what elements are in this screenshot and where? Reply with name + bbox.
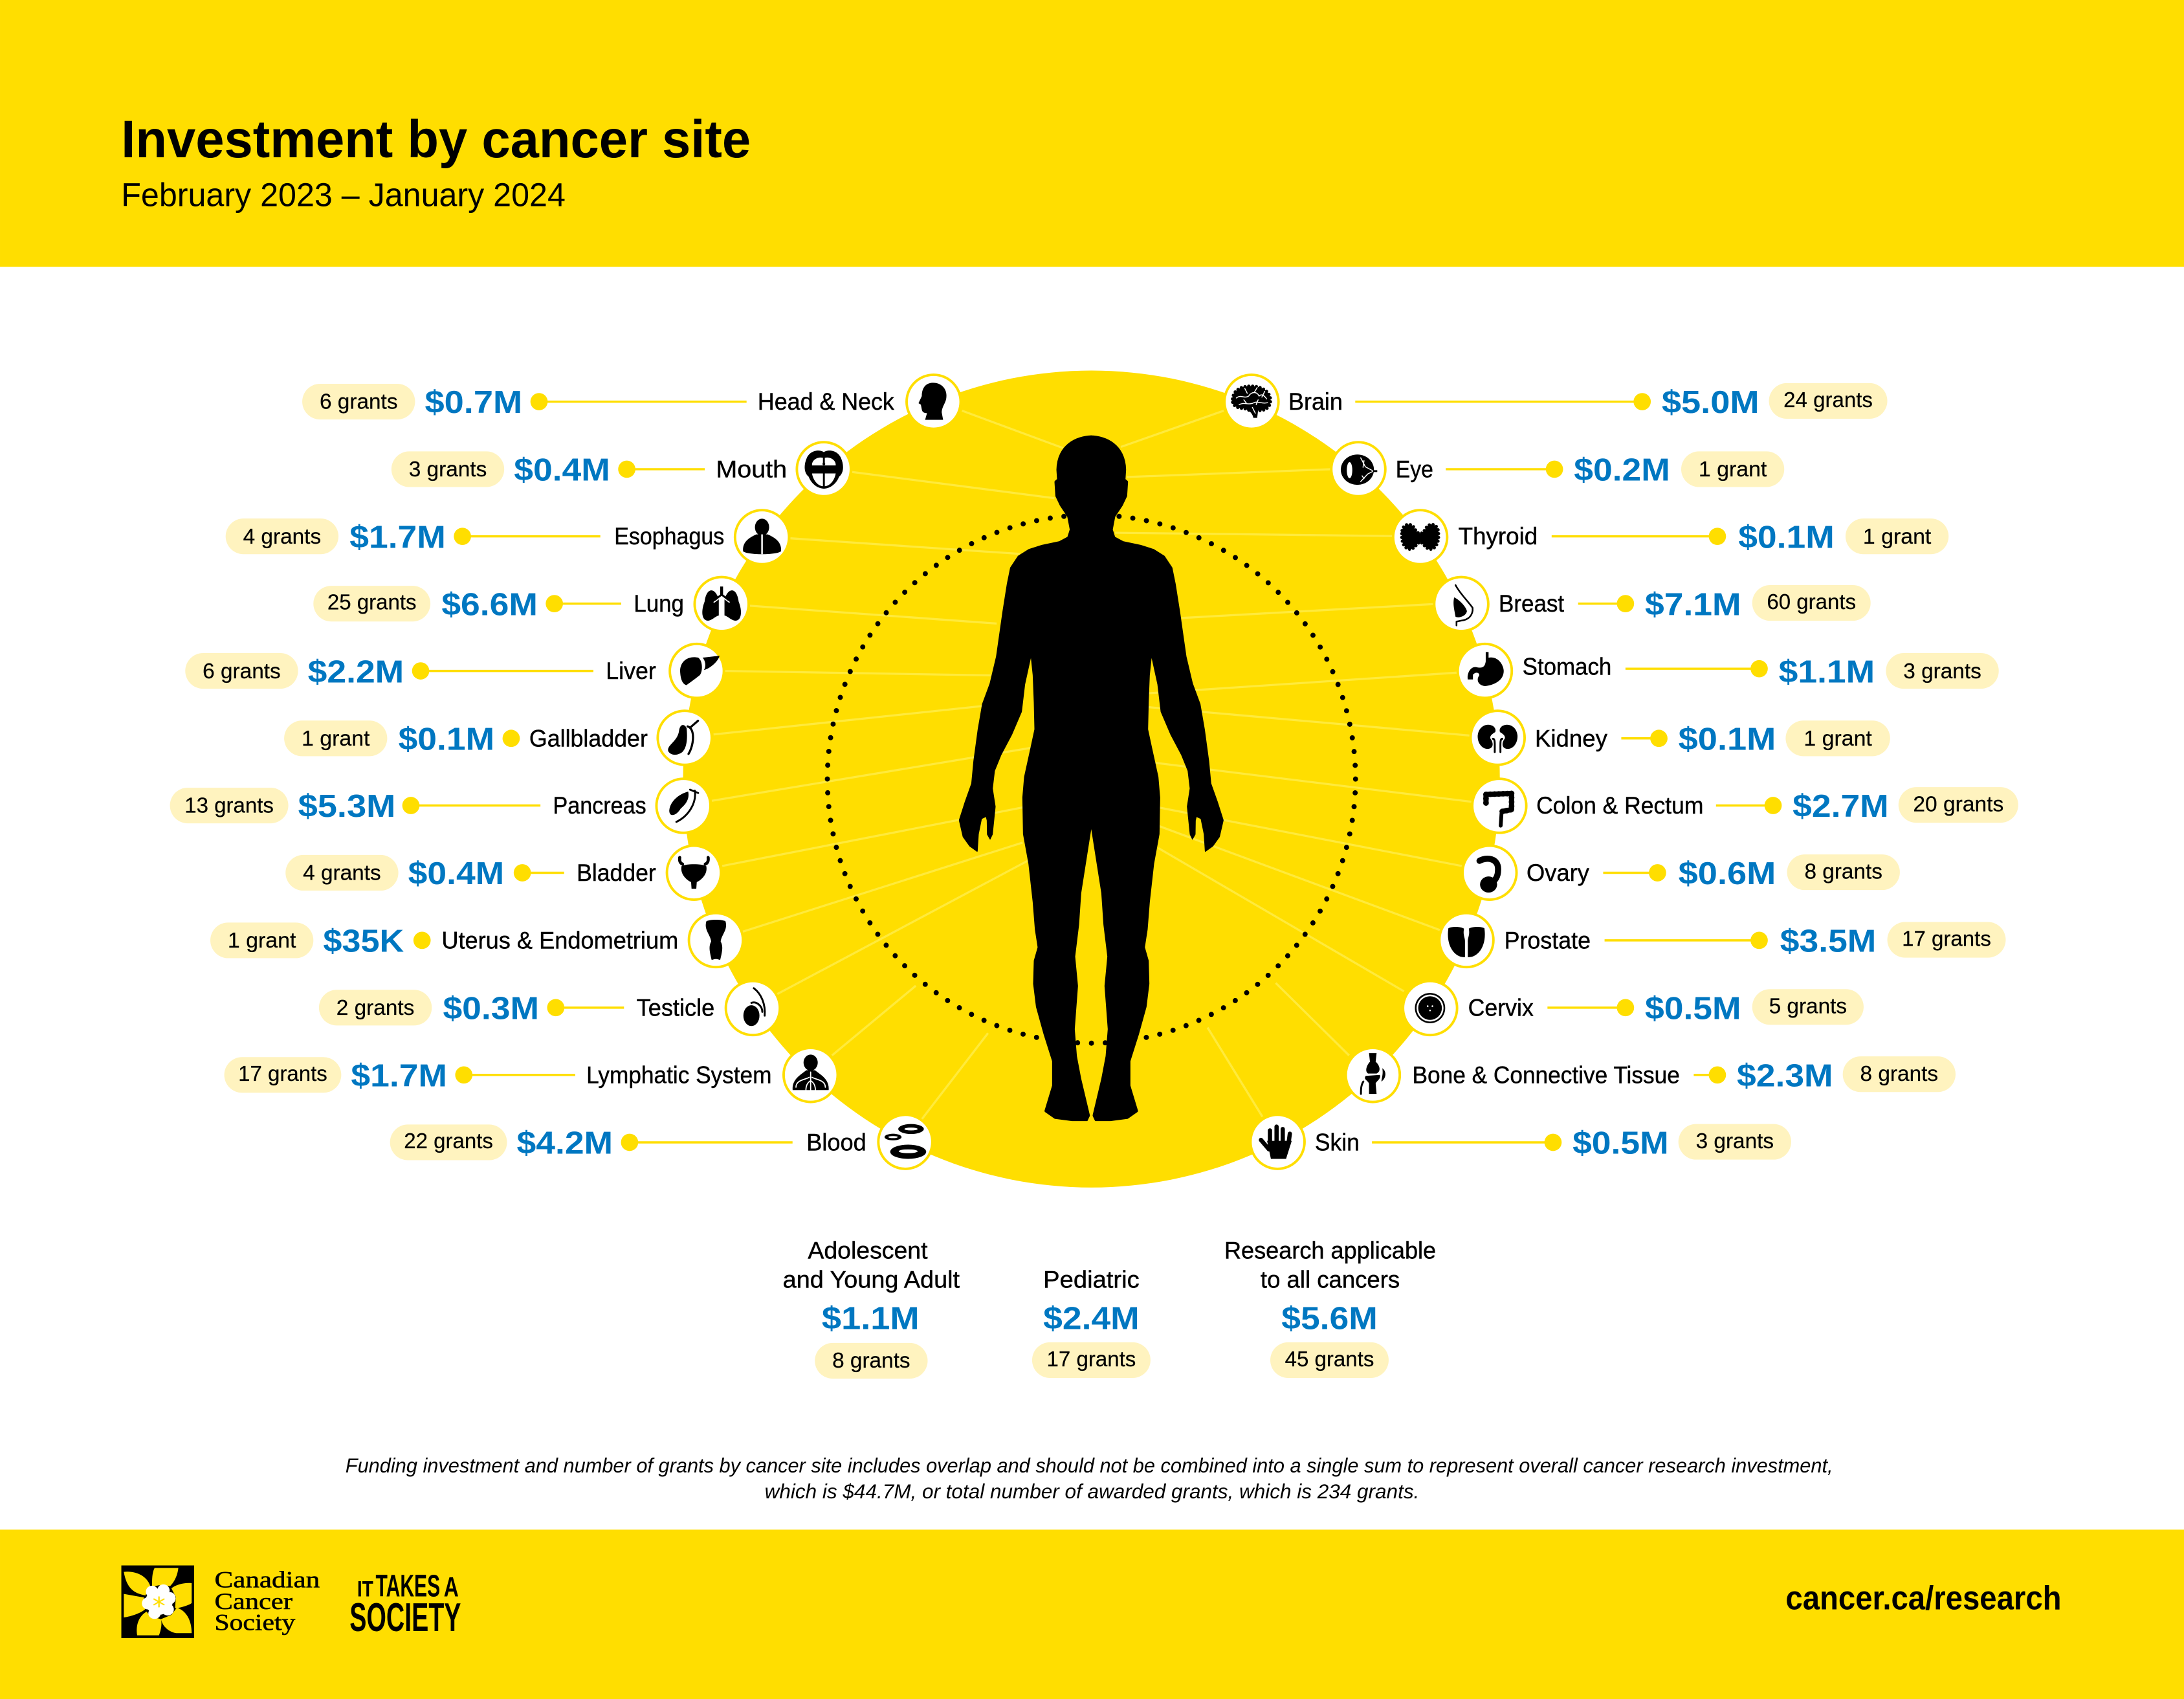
row: Ovary: 8 grants: [1804, 860, 1882, 884]
row: Stomach: 3 grants: [1903, 660, 1981, 683]
dotted circle: [828, 515, 1356, 1043]
stat: Pediatric: Pediatric: [1043, 1266, 1140, 1293]
row: Testicle: $0.3M: [443, 990, 539, 1026]
row: Lung: Lung: [634, 590, 684, 617]
row: Cervix: Cervix: [1468, 994, 1534, 1021]
row: Blood: [390, 1115, 932, 1169]
row: Esophagus: Esophagus: [614, 523, 724, 550]
row: Cervix: [1403, 981, 1864, 1035]
row: Testicle: [319, 981, 780, 1035]
row: Lymphatic System: [225, 1048, 837, 1102]
row: Head and Neck: 6 grants: [320, 390, 398, 414]
row: Bone and Connective Tissue: Bone & Connective Tissue: [1413, 1061, 1680, 1088]
icon: blood cells: [878, 1115, 932, 1169]
row: Ovary: $0.6M: [1679, 856, 1776, 891]
row: Mouth: $0.4M: [514, 452, 610, 488]
logo: Canadian Cancer Society wordmark: Canadian: [214, 1567, 320, 1593]
row: Thyroid: Thyroid: [1459, 523, 1538, 550]
row: Skin: 3 grants: [1696, 1129, 1774, 1153]
row: Gallbladder: $0.1M: [399, 721, 494, 757]
row: Brain: Brain: [1288, 388, 1343, 415]
row: Kidney: $0.1M: [1679, 721, 1776, 757]
row: Colon and Rectum: [1472, 779, 2018, 833]
icon: prostate: [1439, 913, 1494, 967]
row: Blood: $4.2M: [517, 1126, 613, 1161]
row: Testicle: 2 grants: [336, 996, 414, 1020]
stat: Adolescent and Young Adult: [783, 1237, 960, 1379]
row: Stomach: $1.1M: [1779, 654, 1875, 689]
icon: stomach: [1458, 644, 1512, 698]
row: Lymphatic System: $1.7M: [351, 1058, 447, 1093]
row: Eye: Eye: [1396, 456, 1433, 482]
row: Gallbladder: Gallbladder: [529, 725, 648, 751]
row: Mouth: [392, 442, 851, 496]
row: Thyroid: $0.1M: [1738, 519, 1835, 555]
row: Lung: $6.6M: [441, 586, 538, 622]
row: Prostate: [1439, 913, 2005, 967]
row: Ovary: Ovary: [1527, 860, 1590, 886]
row: Pancreas: $5.3M: [298, 788, 395, 824]
stat: Pediatric: $2.4M: [1043, 1300, 1140, 1336]
icon: eye: [1331, 442, 1385, 496]
footnote: which is $44.7M, or total number of awarded grants, which is 234 grants.: [765, 1480, 1419, 1503]
icon: liver: [670, 644, 724, 698]
row: Pancreas: [170, 779, 711, 833]
row: Skin: [1250, 1115, 1791, 1169]
row: Lymphatic System: 17 grants: [238, 1062, 327, 1086]
stat: Pediatric: 17 grants: [1047, 1348, 1136, 1371]
icon: breast: [1434, 577, 1488, 631]
row: Prostate: $3.5M: [1780, 924, 1876, 959]
row: Liver: 6 grants: [203, 660, 281, 683]
row: Eye: [1331, 442, 1784, 496]
row: Blood: 22 grants: [404, 1129, 493, 1153]
icon: head: [907, 375, 961, 429]
row: Kidney: 1 grant: [1803, 727, 1873, 751]
logo: daffodil mark: [122, 1566, 194, 1638]
icon: pancreas: [656, 779, 711, 833]
row: Gallbladder: 1 grant: [302, 727, 370, 751]
row: Lung: [313, 577, 749, 631]
logo: It Takes a Society: IT: [357, 1577, 373, 1602]
row: Bladder: $0.4M: [408, 856, 504, 891]
row: Skin: Skin: [1315, 1129, 1360, 1155]
icon: hand: [1250, 1115, 1305, 1169]
row: Thyroid: 1 grant: [1863, 525, 1932, 549]
logo: It Takes a Society: SOCIETY: [349, 1595, 461, 1640]
icon: knee joint: [1346, 1048, 1400, 1102]
row: Stomach: [1458, 644, 1999, 698]
stat: Adolescent and Young Adult: 8 grants: [832, 1349, 910, 1373]
row: Skin: $0.5M: [1572, 1126, 1669, 1161]
icon: bladder: [667, 846, 721, 900]
row: Gallbladder: [284, 711, 712, 765]
subtitle: February 2023 – January 2024: [121, 177, 566, 214]
row: Brain: [1224, 375, 1888, 429]
icon: uterus: [689, 913, 743, 967]
stat: Research applicable to all cancers: Research applicable: [1224, 1237, 1436, 1263]
row: Bladder: 4 grants: [303, 861, 381, 885]
row: Uterus and Endometrium: 1 grant: [228, 929, 296, 953]
header band: [0, 0, 2184, 267]
row: Kidney: Kidney: [1535, 725, 1608, 751]
row: Head and Neck: [302, 375, 961, 429]
row: Blood: Blood: [806, 1129, 866, 1155]
row: Bone and Connective Tissue: [1346, 1048, 1956, 1102]
icon: cervix: [1403, 981, 1457, 1035]
icon: lymphatic system: [784, 1048, 837, 1102]
row: Liver: $2.2M: [308, 654, 404, 689]
row: Bone and Connective Tissue: 8 grants: [1860, 1062, 1938, 1086]
row: Liver: [185, 644, 724, 698]
icon: mouth: [797, 442, 851, 496]
row: Head and Neck: $0.7M: [425, 384, 522, 420]
row: Cervix: $0.5M: [1645, 990, 1741, 1026]
row: Colon and Rectum: 20 grants: [1913, 792, 2003, 816]
row: Uterus and Endometrium: $35K: [323, 924, 404, 959]
row: Thyroid: [1393, 510, 1948, 564]
row: Uterus and Endometrium: Uterus & Endometrium: [441, 927, 678, 953]
row: Stomach: Stomach: [1523, 653, 1611, 680]
row: Esophagus: 4 grants: [243, 525, 321, 549]
row: Breast: [1434, 577, 1871, 631]
row: Colon and Rectum: $2.7M: [1792, 788, 1889, 824]
stat: Research applicable to all cancers: to all cancers: [1261, 1266, 1400, 1293]
icon: brain: [1224, 375, 1279, 429]
footer band: [0, 1529, 2184, 1699]
row: Prostate: 17 grants: [1902, 927, 1991, 951]
row: Breast: 60 grants: [1767, 590, 1856, 614]
icon: colon: [1472, 779, 1527, 833]
row: Liver: Liver: [606, 658, 656, 684]
row: Kidney: [1471, 711, 1890, 765]
logo: It Takes a Society: [349, 1569, 461, 1640]
icon: ovary: [1462, 846, 1517, 900]
icon: gallbladder: [657, 711, 712, 765]
row: Mouth: 3 grants: [409, 458, 487, 482]
stat: Research applicable to all cancers: 45 grants: [1285, 1348, 1374, 1371]
central yellow disc: [683, 371, 1500, 1188]
row: Pancreas: Pancreas: [553, 792, 646, 819]
row: Brain: $5.0M: [1662, 384, 1759, 420]
row: Prostate: Prostate: [1505, 927, 1591, 953]
stat: Adolescent and Young Adult: and Young Adult: [783, 1266, 960, 1293]
row: Bone and Connective Tissue: $2.3M: [1737, 1058, 1833, 1093]
title: Investment by cancer site: [121, 110, 751, 169]
row: Cervix: 5 grants: [1769, 994, 1847, 1018]
row: Lung: 25 grants: [327, 591, 417, 615]
row: Head and Neck: Head & Neck: [758, 388, 895, 415]
row: Lymphatic System: Lymphatic System: [586, 1061, 771, 1088]
logo: It Takes a Society: A: [444, 1572, 459, 1603]
row: Uterus and Endometrium: [210, 913, 743, 967]
row: Eye: $0.2M: [1574, 452, 1670, 488]
stat: Adolescent and Young Adult: $1.1M: [822, 1300, 920, 1336]
icon: thyroid: [1393, 510, 1447, 564]
logo: It Takes a Society: TAKES: [376, 1569, 440, 1604]
row: Eye: 1 grant: [1699, 458, 1767, 482]
logo: Canadian Cancer Society wordmark: [214, 1567, 320, 1635]
stat: Research applicable to all cancers: [1224, 1237, 1436, 1378]
logo: Canadian Cancer Society wordmark: Society: [214, 1609, 296, 1635]
row: Pancreas: 13 grants: [184, 794, 274, 818]
row: Esophagus: $1.7M: [349, 519, 446, 555]
row: Breast: $7.1M: [1645, 586, 1741, 622]
row: Brain: 24 grants: [1783, 388, 1873, 412]
logo: Canadian Cancer Society wordmark: Cancer: [214, 1588, 292, 1614]
website link: cancer.ca/research: [1785, 1579, 2062, 1617]
row: Bladder: [285, 846, 721, 900]
icon: kidneys: [1471, 711, 1525, 765]
row: Colon and Rectum: Colon & Rectum: [1536, 792, 1703, 819]
row: Mouth: Mouth: [716, 456, 787, 482]
stat: Research applicable to all cancers: $5.6M: [1281, 1300, 1378, 1336]
icon: testicle: [726, 981, 780, 1035]
footnote: [346, 1454, 1833, 1503]
row: Breast: Breast: [1499, 590, 1564, 617]
row: Esophagus: [226, 510, 789, 564]
row: Bladder: Bladder: [577, 860, 656, 886]
row: Ovary: [1462, 846, 1900, 900]
rays linking organs to the body: [712, 411, 1472, 1120]
stat: Adolescent and Young Adult: Adolescent: [808, 1237, 928, 1263]
stat: Pediatric: [1032, 1266, 1151, 1378]
icon: lungs: [694, 577, 749, 631]
footnote: Funding investment and number of grants by cancer site includes overlap and should not be combined into a single sum to represent overall cancer research investment,: [346, 1454, 1833, 1477]
icon: esophagus: [735, 510, 789, 564]
row: Testicle: Testicle: [637, 994, 714, 1021]
body silhouette: [960, 437, 1223, 1120]
